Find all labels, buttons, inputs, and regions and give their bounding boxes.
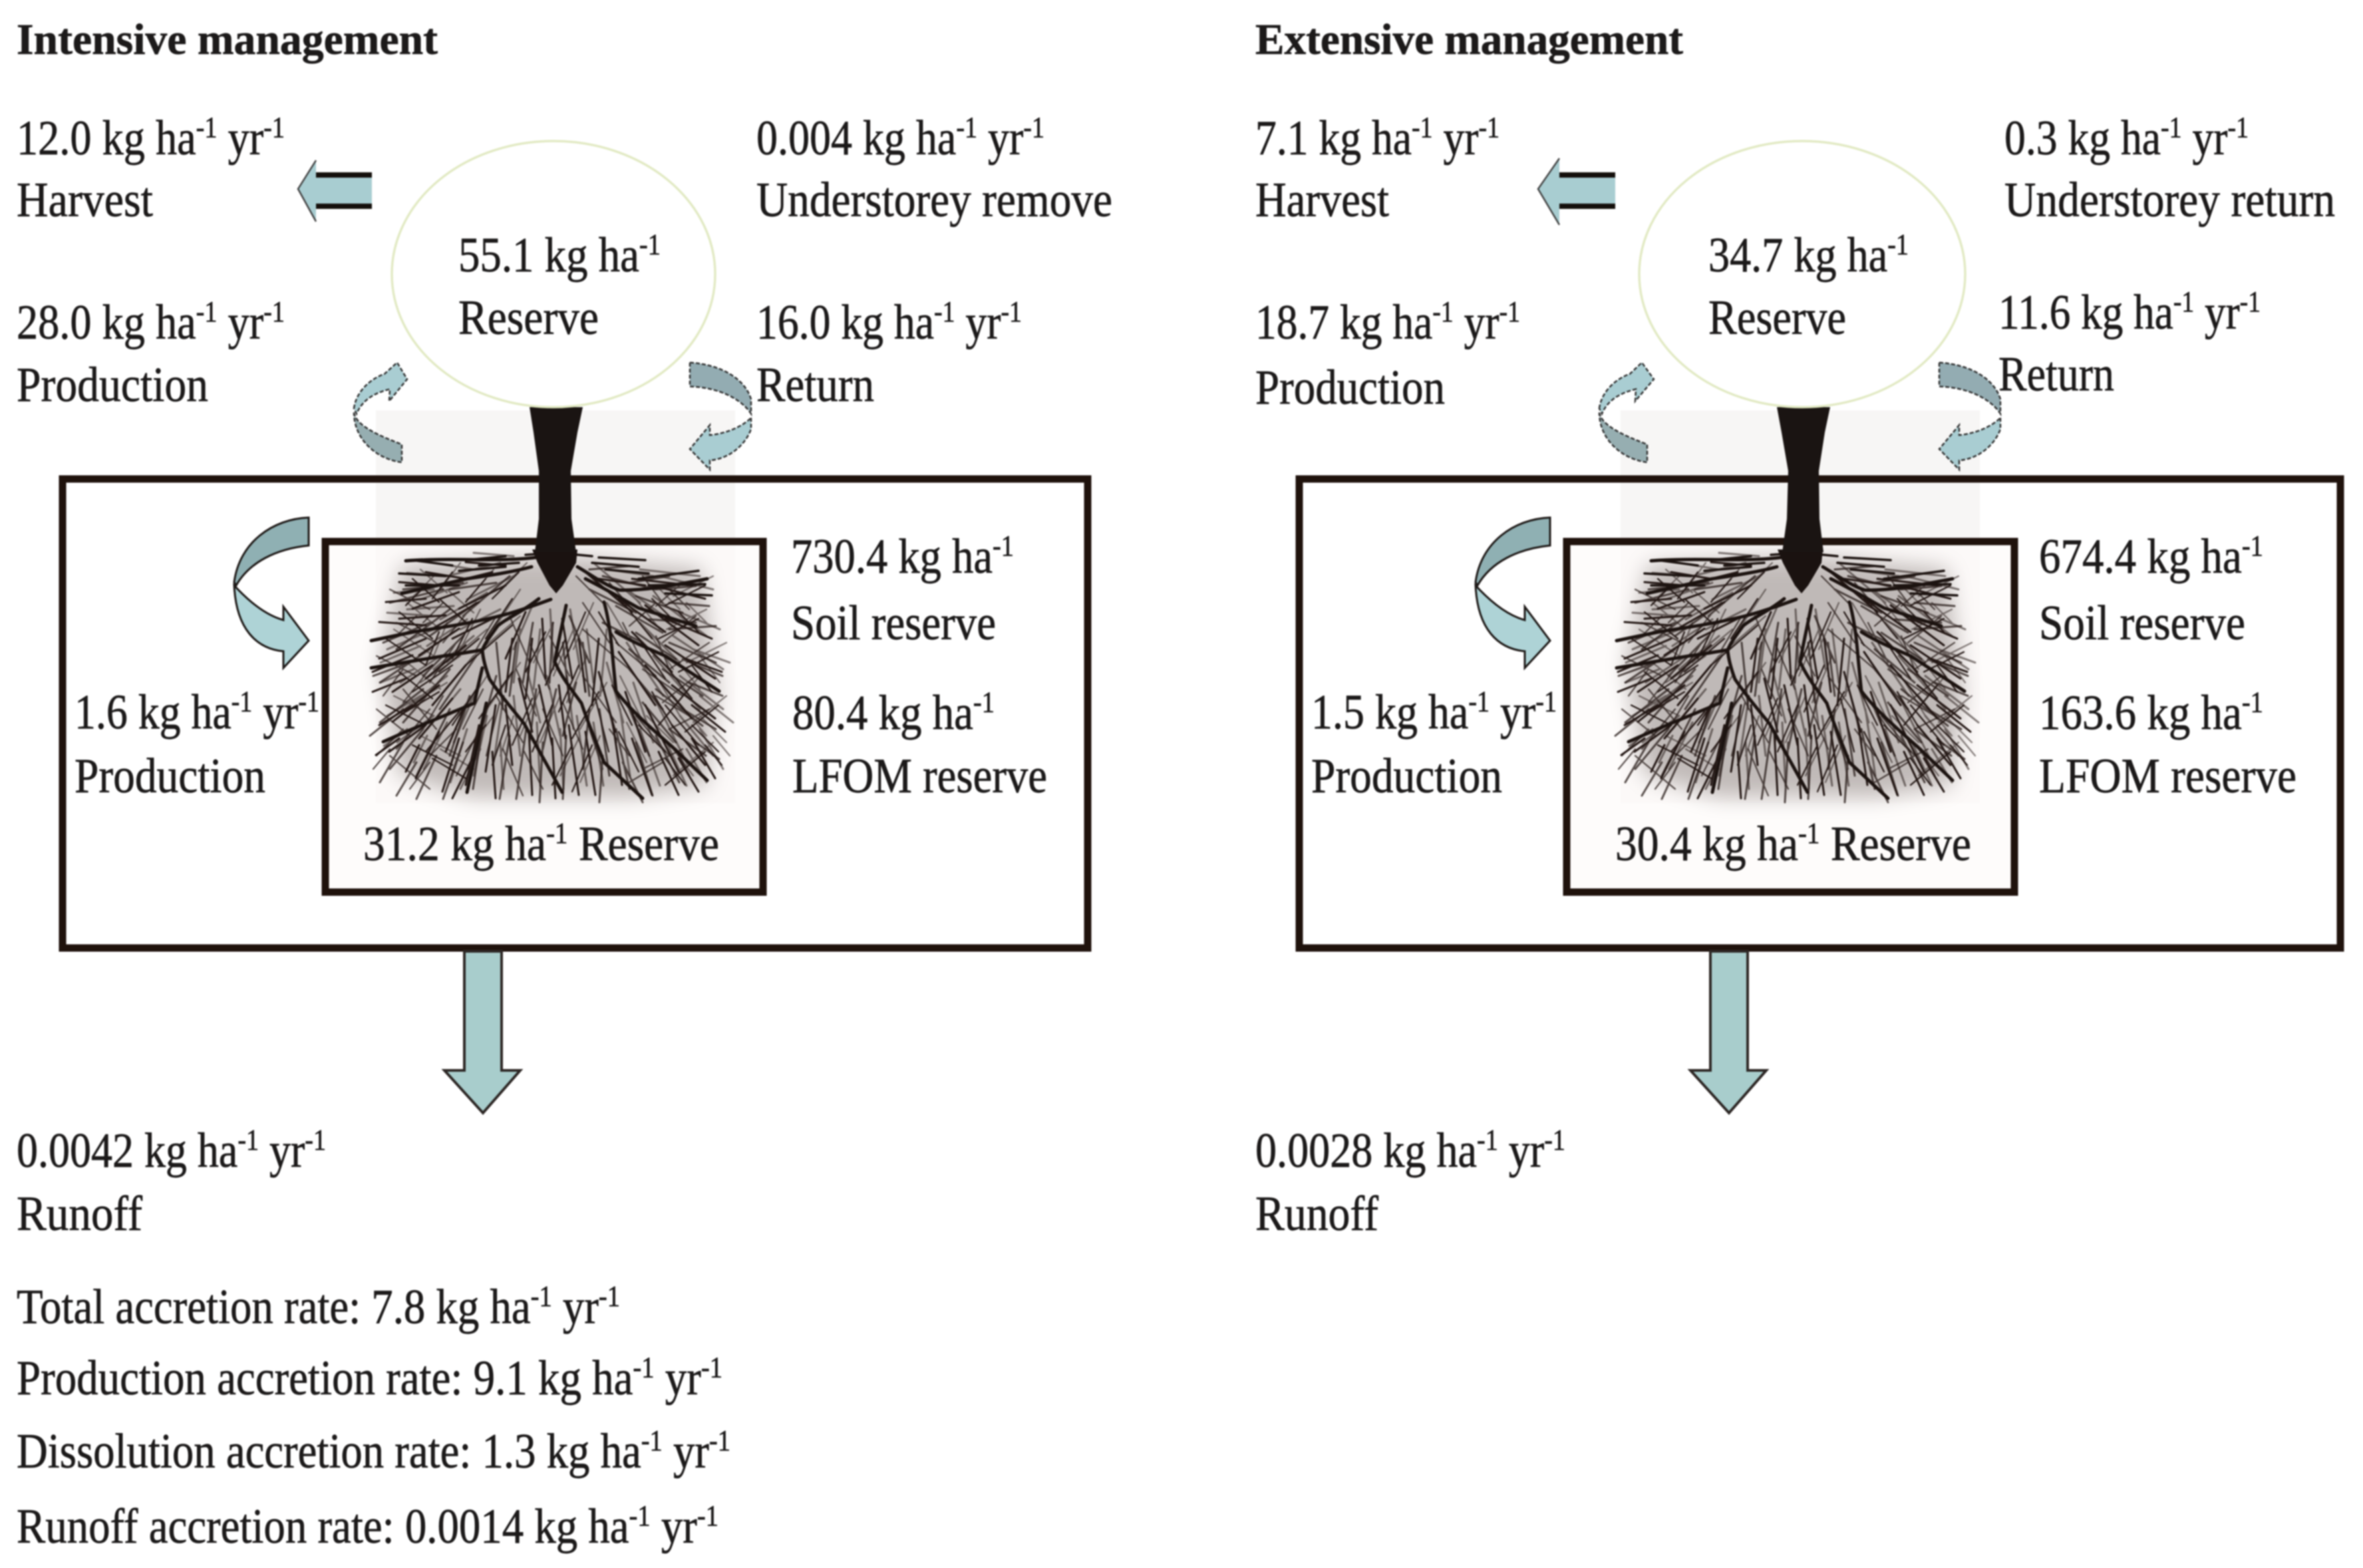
root box [325, 542, 763, 892]
label: runoff: yr [259, 1124, 305, 1178]
accretion rates text block: yr [663, 1424, 709, 1479]
label: runoff [17, 1124, 326, 1241]
crown reserve text [458, 228, 661, 345]
label: return [756, 295, 1022, 412]
label: soil production: -1 [1535, 685, 1557, 718]
heading: intensive management: Intensive management [17, 15, 438, 64]
accretion rates text block: Runoff accretion rate: 0.0014 kg ha [17, 1499, 716, 1554]
label: soil reserve [2039, 530, 2263, 651]
label: harvest [1255, 111, 1499, 228]
label: root reserve: 30.4 kg ha [1615, 817, 1821, 871]
accretion rates text block: -1 [709, 1424, 730, 1457]
label: production: -1 [1499, 295, 1520, 328]
label: runoff: -1 [237, 1124, 259, 1156]
crown reserve text [1708, 228, 1909, 345]
label: soil production: 1.6 kg ha [75, 685, 256, 740]
crown reserve text: Reserve [458, 291, 599, 345]
accretion rates text block: -1 [697, 1499, 718, 1532]
label: understorey return [2004, 111, 2335, 228]
crown reserve text: Reserve [1708, 291, 1846, 345]
label: understorey return: yr [2182, 111, 2227, 166]
label: root reserve: 31.2 kg ha [363, 817, 569, 871]
accretion rates text block: -1 [701, 1351, 722, 1384]
tree image backdrop [1621, 410, 1980, 803]
label: return: 11.6 kg ha [1998, 285, 2203, 340]
label: soil production: yr [252, 685, 298, 740]
crown reserve text: -1 [639, 228, 661, 261]
arrow: soil production to roots [1476, 518, 1550, 668]
label: production: 28.0 kg ha [17, 295, 223, 350]
label: production: -1 [1432, 295, 1454, 328]
soil box [63, 479, 1088, 948]
label: return: -1 [2173, 285, 2194, 318]
label: return: yr [955, 295, 1001, 350]
tree trunk [530, 407, 583, 552]
panel: intensive management [17, 15, 1112, 1554]
label: harvest: -1 [196, 111, 218, 144]
label: return: -1 [1001, 295, 1022, 328]
tree crown circle [392, 141, 715, 407]
label: LFOM reserve: 163.6 kg ha [2039, 686, 2270, 740]
accretion rates text block: -1 [531, 1280, 552, 1313]
label: harvest: Harvest [1255, 173, 1389, 228]
label: return: 16.0 kg ha [756, 295, 963, 350]
arrow: production to crown [354, 363, 407, 462]
tree image backdrop [376, 410, 735, 803]
accretion rates text block: -1 [641, 1424, 663, 1457]
root box [1567, 542, 2014, 892]
arrow: production to crown [1599, 363, 1654, 462]
heading: extensive management: Extensive management [1255, 15, 1683, 64]
label: runoff: Runoff [17, 1187, 142, 1241]
accretion rates text block: Total accretion rate: 7.8 kg ha [17, 1280, 603, 1334]
label: LFOM reserve: LFOM reserve [2039, 749, 2296, 804]
arrow: runoff [1690, 951, 1766, 1113]
arrow: soil production to roots [234, 518, 309, 668]
label: harvest: 7.1 kg ha [1255, 111, 1437, 166]
label: soil reserve: Soil reserve [791, 596, 996, 651]
crown reserve text: -1 [1887, 228, 1909, 261]
arrow: harvest [298, 160, 372, 222]
label: production: yr [218, 295, 263, 350]
accretion rates text block: Production accretion rate: 9.1 kg ha [17, 1351, 719, 1406]
label: understorey remove: yr [977, 111, 1023, 166]
label: return [1998, 285, 2261, 402]
label: soil production: yr [1490, 685, 1535, 740]
panel: extensive management [1255, 15, 2340, 1241]
label: runoff: Runoff [1255, 1187, 1378, 1241]
label: understorey remove: 0.004 kg ha [756, 111, 987, 166]
crown reserve text: 34.7 kg ha [1708, 228, 1915, 283]
label: harvest: -1 [1412, 111, 1433, 144]
label: return: -1 [2240, 285, 2261, 318]
tree roots [1615, 549, 1978, 802]
arrow: return to soil [1939, 363, 2000, 470]
label: soil reserve: -1 [2242, 530, 2263, 562]
label: production: yr [1454, 295, 1499, 350]
label: understorey return: -1 [2227, 111, 2249, 144]
label: soil production: -1 [298, 685, 319, 718]
label: understorey remove: Understorey remove [756, 173, 1112, 228]
arrow: harvest [1538, 158, 1615, 225]
label: runoff: yr [1498, 1124, 1544, 1178]
label: soil reserve: 674.4 kg ha [2039, 530, 2270, 584]
accretion rates text block: yr [651, 1499, 697, 1554]
label: soil reserve: 730.4 kg ha [791, 530, 1022, 584]
arrow: runoff [444, 951, 520, 1113]
label: return: yr [2194, 285, 2240, 340]
label: soil production [1311, 685, 1557, 804]
label: soil reserve: Soil reserve [2039, 596, 2245, 651]
label: understorey remove: -1 [1023, 111, 1044, 144]
accretion rates text block [17, 1280, 730, 1554]
accretion rates text block: yr [655, 1351, 701, 1406]
accretion rates text block: yr [552, 1280, 599, 1334]
label: root reserve: -1 [546, 817, 567, 850]
label: understorey return: 0.3 kg ha [2004, 111, 2186, 166]
label: LFOM reserve [792, 686, 1047, 804]
accretion rates text block: -1 [633, 1351, 655, 1384]
label: runoff [1255, 1124, 1565, 1241]
label: production: -1 [263, 295, 285, 328]
label: production: 18.7 kg ha [1255, 295, 1462, 350]
tree crown circle [1639, 141, 1965, 407]
label: production: Production [17, 358, 208, 412]
tree trunk [1777, 407, 1830, 552]
tree roots [370, 549, 733, 802]
label: harvest: 12.0 kg ha [17, 111, 223, 166]
label: return: Return [1998, 347, 2114, 402]
label: root reserve: Reserve [567, 817, 719, 871]
label: harvest: -1 [1478, 111, 1499, 144]
label: return: Return [756, 358, 874, 412]
label: LFOM reserve: -1 [973, 686, 995, 718]
label: soil reserve: -1 [993, 530, 1014, 562]
accretion rates text block: -1 [599, 1280, 620, 1313]
label: understorey return: -1 [2161, 111, 2182, 144]
label: LFOM reserve: -1 [2242, 686, 2263, 718]
label: harvest [17, 111, 285, 228]
label: understorey remove: -1 [956, 111, 977, 144]
label: soil production [75, 685, 319, 804]
label: LFOM reserve [2039, 686, 2296, 804]
label: return: -1 [934, 295, 955, 328]
label: runoff: -1 [1477, 1124, 1498, 1156]
label: runoff: -1 [305, 1124, 326, 1156]
label: production [1255, 295, 1520, 415]
label: production: -1 [196, 295, 218, 328]
label: production [17, 295, 285, 412]
label: root reserve: -1 [1798, 817, 1819, 850]
label: harvest: Harvest [17, 173, 153, 228]
label: runoff: 0.0028 kg ha [1255, 1124, 1511, 1178]
label: harvest: yr [1433, 111, 1478, 166]
label: production: Production [1255, 361, 1445, 415]
label: soil production: 1.5 kg ha [1311, 685, 1493, 740]
label: soil production: -1 [232, 685, 252, 718]
soil box [1299, 479, 2340, 948]
label: soil reserve [791, 530, 1014, 651]
arrow: return to soil [690, 363, 751, 470]
label: runoff: 0.0042 kg ha [17, 1124, 272, 1178]
label: understorey remove [756, 111, 1112, 228]
label: LFOM reserve: LFOM reserve [792, 749, 1047, 804]
accretion rates text block: -1 [629, 1499, 651, 1532]
label: harvest: yr [218, 111, 263, 166]
label: soil production: -1 [1468, 685, 1490, 718]
label: soil production: Production [1311, 749, 1502, 804]
crown reserve text: 55.1 kg ha [458, 228, 665, 283]
label: harvest: -1 [263, 111, 285, 144]
label: runoff: -1 [1544, 1124, 1565, 1156]
label: LFOM reserve: 80.4 kg ha [792, 686, 999, 740]
label: root reserve: Reserve [1819, 817, 1971, 871]
accretion rates text block: Dissolution accretion rate: 1.3 kg ha [17, 1424, 730, 1479]
label: soil production: Production [75, 749, 265, 804]
